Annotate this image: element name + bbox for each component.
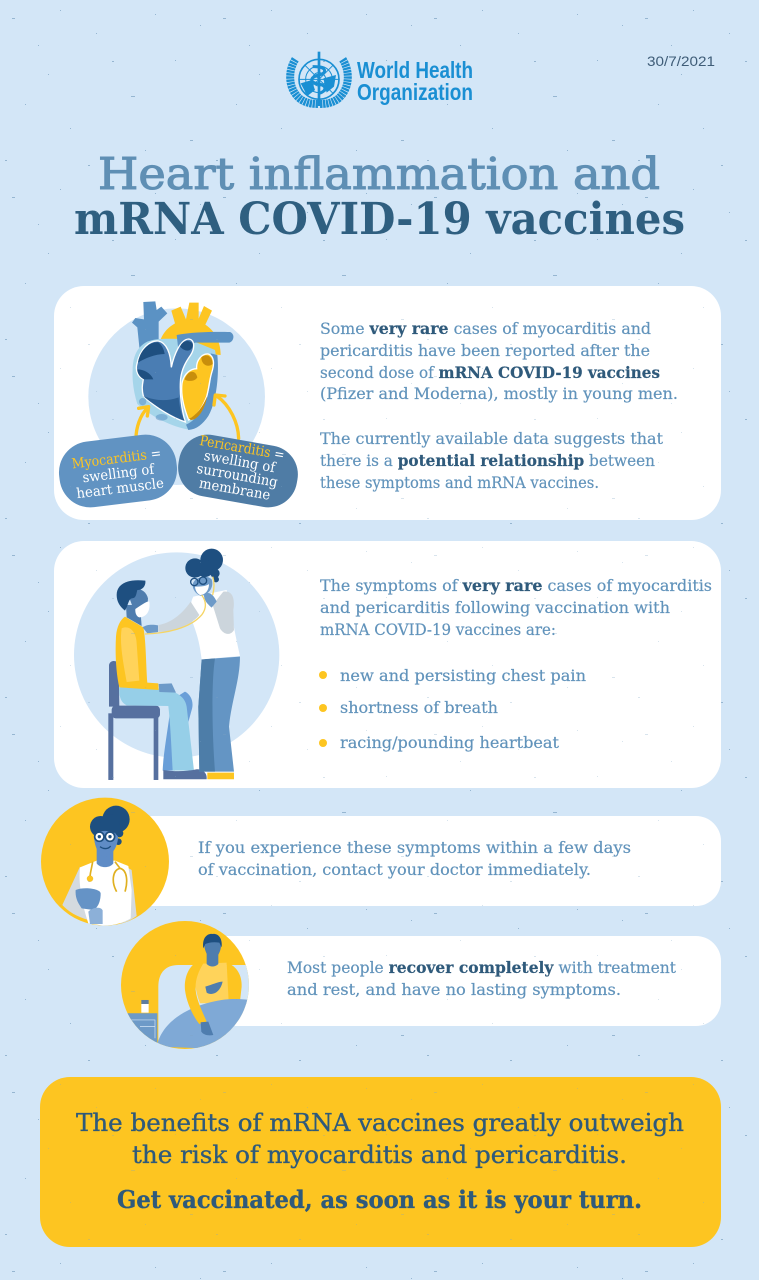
patient shoe bbox=[163, 769, 207, 779]
doctor face bbox=[193, 577, 212, 596]
text: reported cases bbox=[320, 319, 678, 492]
doctor glasses bbox=[191, 577, 207, 586]
doctor raised arm bbox=[213, 591, 234, 634]
callout: benefits outweigh risk: The benefits of mRNA vaccines greatly outweigh bbox=[76, 1109, 684, 1137]
callout: benefits outweigh risk: Get vaccinated, as soon as it is your turn. bbox=[117, 1185, 642, 1214]
callout: benefits outweigh risk: the risk of myocarditis and pericarditis. bbox=[132, 1141, 627, 1169]
label: pericarditis: surrounding bbox=[195, 461, 279, 491]
callout: benefits outweigh risk bbox=[40, 1077, 721, 1247]
patient hand bbox=[159, 683, 176, 693]
patient near leg bbox=[119, 687, 194, 771]
panel: recovery bbox=[121, 921, 721, 1050]
text: symptoms intro: and pericarditis following vaccination with bbox=[320, 599, 670, 617]
label: pericarditis bbox=[174, 430, 302, 512]
list: symptoms bbox=[319, 667, 586, 752]
text: reported cases: The currently available data suggests that bbox=[320, 430, 664, 448]
label: myocarditis: heart muscle bbox=[76, 476, 165, 502]
logo: World Health Organization bbox=[290, 52, 473, 106]
chair bbox=[108, 661, 160, 780]
text: symptoms intro: mRNA COVID-19 vaccines are: bbox=[320, 621, 556, 639]
doctor torso bbox=[190, 590, 240, 659]
text: recovery: Most people recover completely with treatment bbox=[287, 958, 677, 977]
date: 30/7/2021 bbox=[647, 53, 715, 69]
text: reported cases: these symptoms and mRNA vaccines. bbox=[320, 474, 599, 492]
label: pericarditis: swelling of bbox=[203, 448, 278, 477]
text: contact doctor: of vaccination, contact your doctor immediately. bbox=[198, 861, 591, 879]
arrow: to surrounding membrane bbox=[214, 395, 239, 438]
label: myocarditis bbox=[55, 431, 181, 511]
text: contact doctor: If you experience these symptoms within a few days bbox=[198, 839, 631, 857]
text: reported cases: second dose of mRNA COVID-19 vaccines bbox=[320, 363, 660, 382]
label: pericarditis: membrane bbox=[198, 476, 272, 504]
title bbox=[74, 149, 685, 245]
illustration: doctor examining patient bbox=[74, 549, 279, 780]
text: reported cases: (Pfizer and Moderna), mostly in young men. bbox=[320, 385, 678, 403]
doctor hair bbox=[185, 549, 223, 582]
text: symptoms intro: The symptoms of very rare cases of myocarditis bbox=[320, 576, 712, 595]
text: recovery bbox=[287, 958, 677, 999]
label: pericarditis: Pericarditis = bbox=[198, 433, 286, 464]
logo wordmark: Organization bbox=[357, 79, 473, 105]
patient torso bbox=[116, 617, 159, 690]
text: reported cases: Some very rare cases of myocarditis and bbox=[320, 319, 651, 338]
arrow: to heart muscle bbox=[136, 407, 149, 438]
label: myocarditis: Myocarditis = bbox=[71, 446, 162, 473]
stethoscope bbox=[145, 577, 214, 634]
list: symptoms: shortness of breath bbox=[340, 699, 498, 717]
illustration: doctor portrait bbox=[41, 798, 169, 926]
doctor trousers bbox=[198, 657, 240, 772]
title: Heart inflammation and bbox=[98, 149, 660, 200]
panel: contact your doctor bbox=[41, 798, 721, 926]
patient far leg bbox=[163, 692, 193, 771]
text: contact doctor bbox=[198, 839, 631, 879]
title: mRNA COVID-19 vaccines bbox=[74, 194, 685, 245]
logo wordmark bbox=[357, 57, 473, 105]
illustration: recovering patient bbox=[121, 921, 253, 1050]
text: reported cases: pericarditis have been reported after the bbox=[320, 342, 650, 360]
illustration: heart diagram bbox=[55, 301, 302, 512]
doctor shoe bbox=[207, 773, 234, 779]
text: recovery: and rest, and have no lasting symptoms. bbox=[287, 981, 621, 999]
list: symptoms: new and persisting chest pain bbox=[340, 667, 586, 685]
logo wordmark: World Health bbox=[357, 57, 473, 83]
text: symptoms intro bbox=[320, 576, 712, 639]
panel: symptoms bbox=[54, 541, 721, 788]
label: myocarditis: swelling of bbox=[82, 461, 157, 486]
patient head bbox=[126, 605, 142, 626]
doctor arm reaching bbox=[158, 602, 199, 632]
list: symptoms: racing/pounding heartbeat bbox=[340, 734, 560, 752]
panel: what has been reported bbox=[54, 286, 721, 520]
icon: WHO emblem bbox=[290, 52, 348, 106]
text: reported cases: there is a potential relationship between bbox=[320, 451, 655, 470]
